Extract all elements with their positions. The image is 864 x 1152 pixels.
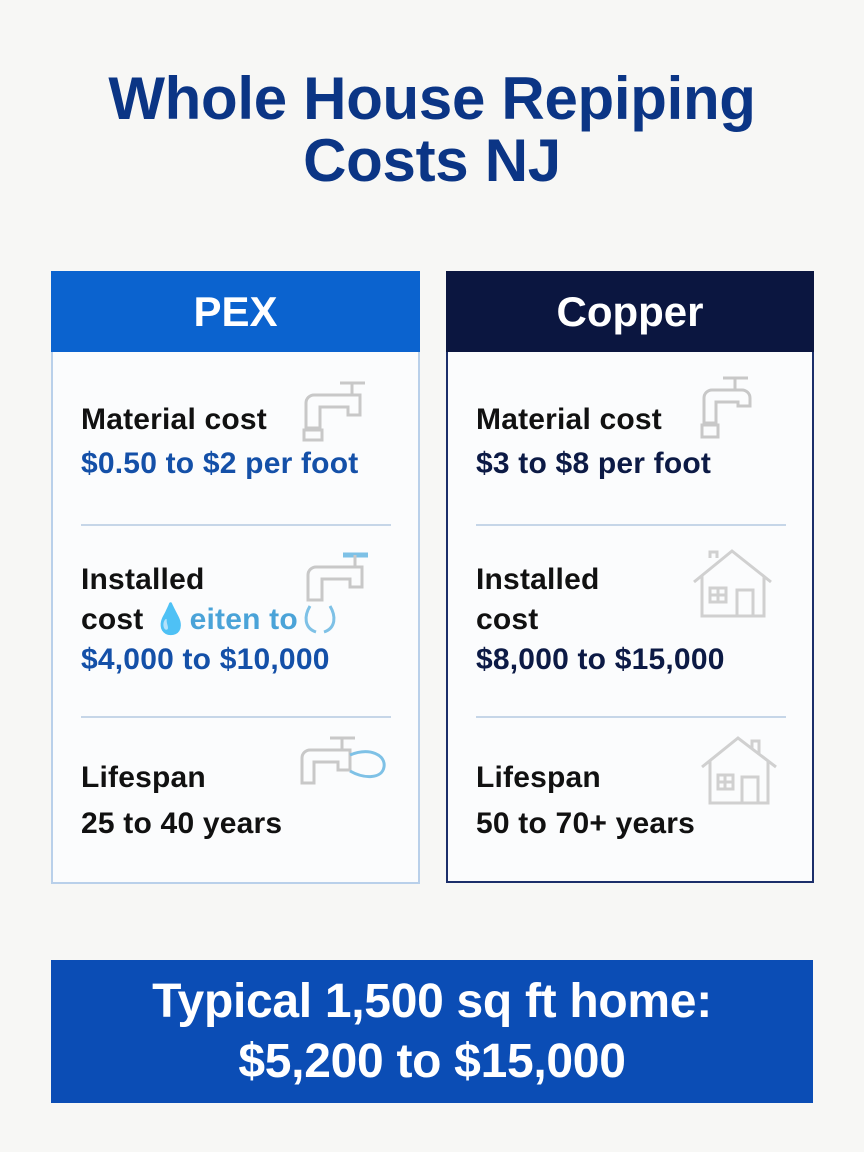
Copper lifespan (476, 761, 695, 840)
PEX lifespan: Lifespan (81, 761, 206, 794)
Copper installed cost: cost (476, 603, 538, 636)
PEX installed cost: $4,000 to $10,000 (81, 643, 330, 676)
icon: house (693, 549, 772, 618)
PEX installed cost: cost 💧eiten to (81, 603, 298, 636)
Copper header (446, 271, 814, 352)
icon: house (701, 736, 777, 804)
PEX material cost: $0.50 to $2 per foot (81, 447, 358, 480)
PEX header (51, 271, 420, 352)
title (108, 65, 756, 194)
Copper material cost: $3 to $8 per foot (476, 447, 711, 480)
panel: PEX (51, 271, 420, 884)
PEX header: PEX (193, 288, 278, 335)
icon: faucet hose (300, 736, 386, 784)
title: Costs NJ (303, 127, 561, 194)
Copper material cost (476, 403, 711, 480)
icon: faucet (700, 376, 752, 438)
PEX material cost: Material cost (81, 403, 267, 436)
Copper installed cost: $8,000 to $15,000 (476, 643, 725, 676)
Copper lifespan: 50 to 70+ years (476, 807, 695, 840)
Copper installed cost (476, 563, 725, 676)
summary banner: $5,200 to $15,000 (238, 1034, 626, 1088)
PEX lifespan (81, 761, 282, 840)
summary banner: Typical 1,500 sq ft home: (152, 974, 712, 1028)
title: Whole House Repiping (108, 65, 756, 132)
Copper lifespan: Lifespan (476, 761, 601, 794)
Copper header: Copper (556, 288, 704, 335)
icon: faucet (302, 382, 365, 442)
panel: Copper (446, 271, 814, 883)
Copper material cost: Material cost (476, 403, 662, 436)
PEX material cost (81, 403, 358, 480)
PEX lifespan: 25 to 40 years (81, 807, 282, 840)
PEX installed cost: Installed (81, 563, 204, 596)
summary banner (51, 960, 813, 1103)
icon: faucet water (304, 552, 368, 634)
PEX installed cost (81, 563, 330, 676)
Copper installed cost: Installed (476, 563, 600, 596)
